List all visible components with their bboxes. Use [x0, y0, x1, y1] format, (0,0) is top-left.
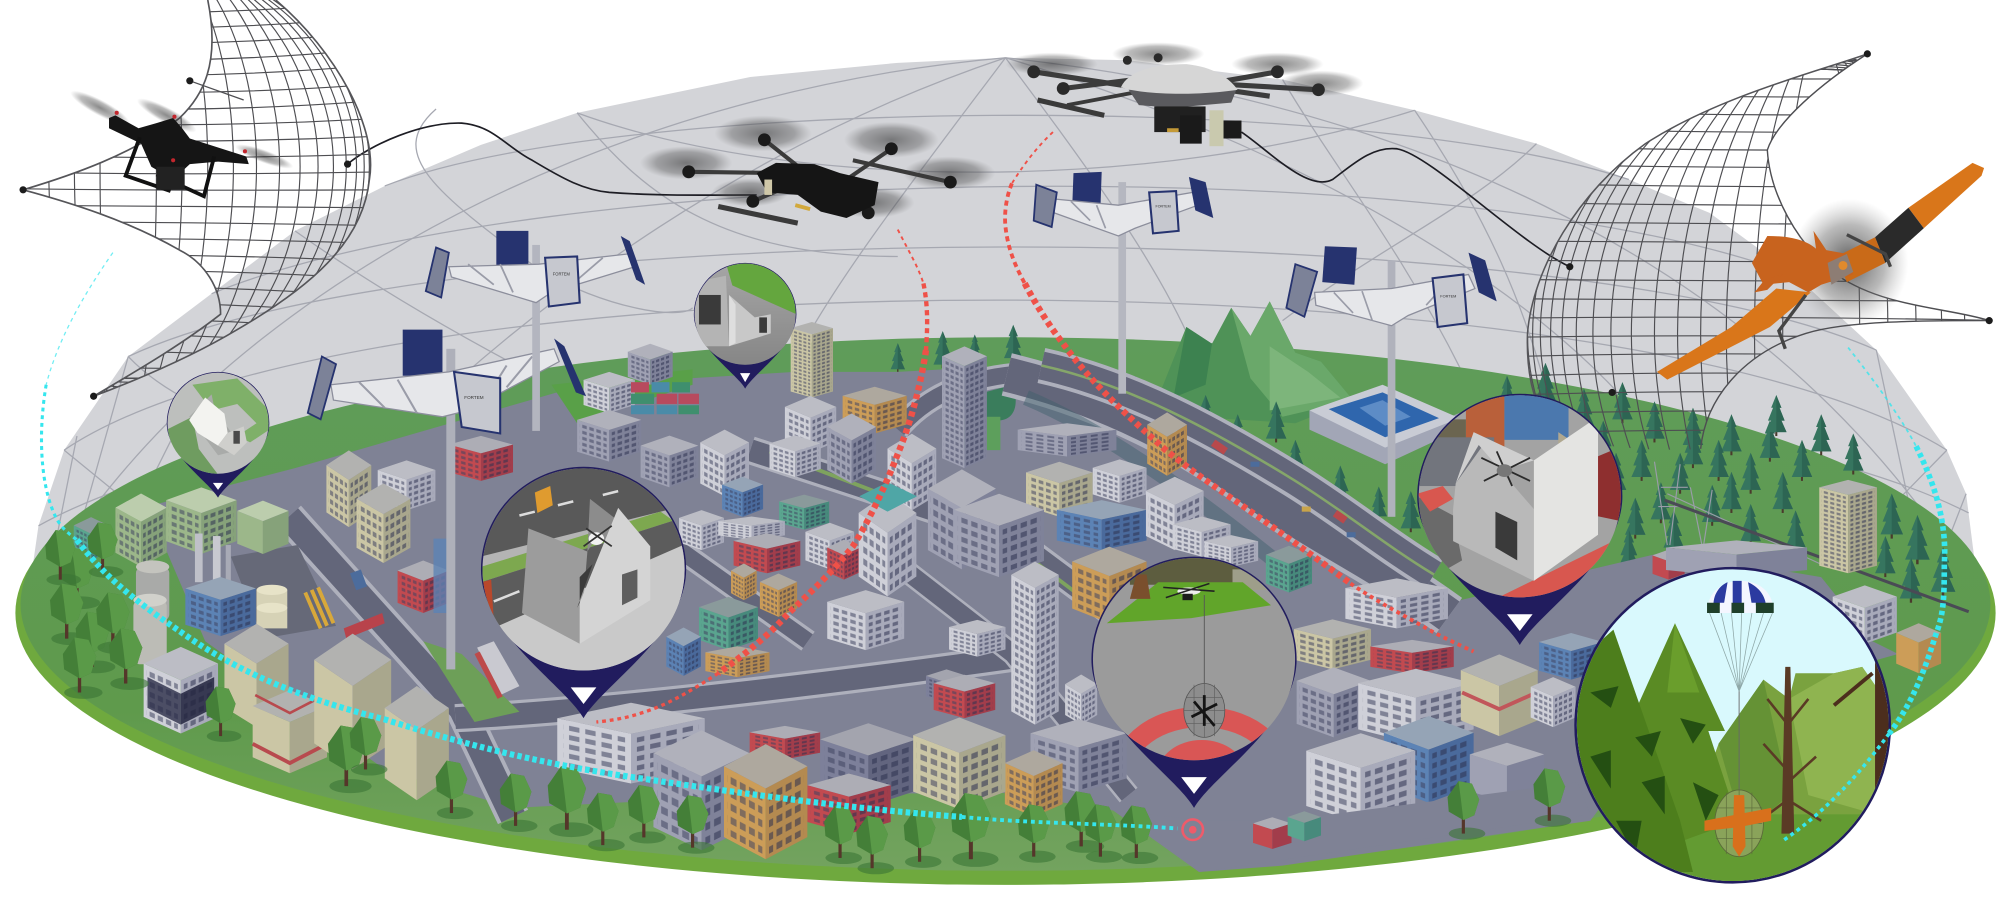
map pin: small left house	[167, 372, 269, 498]
drone: black quadcopter in left net	[67, 85, 295, 196]
dashed flight path: cyan left	[41, 253, 1177, 828]
map pin: large left net drop	[481, 467, 686, 718]
plane: orange fixed-wing drone caught in right net	[1657, 163, 1984, 380]
city ground	[147, 365, 1898, 872]
sensor tower: near left: FORTEM	[553, 272, 571, 277]
left industrial district	[74, 450, 519, 800]
map pin: right net drop	[1417, 394, 1625, 645]
sensor tower: right: FORTEM	[1440, 295, 1456, 299]
sensor tower: near left	[426, 231, 645, 431]
map pin: small top house	[694, 263, 796, 389]
dashed flight path: red right	[1005, 132, 1474, 651]
capture net: left	[19, 0, 372, 400]
sensor tower: far left: FORTEM	[464, 395, 484, 400]
map pin: center net capture	[1091, 557, 1297, 832]
ground disc	[15, 337, 1996, 885]
sensor tower: center	[1034, 172, 1213, 394]
dashed flight path: cyan right	[1784, 348, 1945, 840]
inset circle: parachute recovery in forest	[1571, 568, 1905, 891]
geodesic dome	[32, 58, 1975, 641]
south central buildings	[557, 703, 1006, 859]
capture net: right	[1526, 50, 1993, 450]
railway	[1665, 500, 1969, 612]
sensor tower: far left	[308, 330, 586, 669]
dashed flight path: red left	[596, 230, 927, 722]
drone: silver hexacopter with net launcher	[1006, 42, 1363, 146]
power line pylons	[1654, 462, 1821, 564]
east district buildings	[1266, 480, 1941, 823]
stadium	[1309, 385, 1460, 464]
road network	[231, 369, 1129, 817]
parked vans and plaza	[1113, 782, 1590, 872]
pine forest: back right	[891, 325, 1955, 603]
tether: right	[1241, 132, 1570, 267]
drone: black hexacopter with net launcher	[640, 115, 995, 223]
elevated highway	[1007, 365, 1493, 616]
sensor tower: center: FORTEM	[1156, 205, 1171, 209]
back district buildings	[378, 322, 1685, 580]
mountain range	[1161, 301, 1353, 423]
sensor tower: right	[1286, 246, 1497, 517]
central district buildings	[666, 469, 1258, 817]
street trees: south row	[436, 761, 1571, 874]
container yard	[631, 382, 699, 414]
street trees: left cluster	[45, 522, 387, 793]
tether: left	[348, 123, 757, 195]
